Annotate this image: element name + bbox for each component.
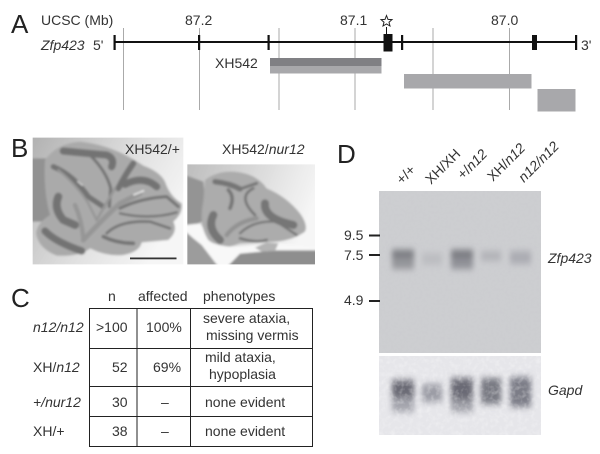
- size marker 9.5: [344, 227, 380, 243]
- panel letter B: B: [11, 133, 28, 163]
- Zfp423 blot: [379, 191, 541, 353]
- panel: C phenotype table: [11, 283, 312, 446]
- lane labels: [393, 138, 562, 187]
- XH542 deletion bar: [270, 58, 382, 74]
- row n12/n12: >100: [96, 319, 128, 335]
- scale bar: [130, 258, 176, 259]
- row XH/+: 38: [112, 423, 128, 439]
- row +/nur12: –: [161, 394, 169, 410]
- row n12/n12: 100%: [146, 319, 182, 335]
- panel letter A: A: [11, 9, 29, 39]
- size marker 4.9: [344, 292, 380, 308]
- row n12/n12: [33, 310, 299, 343]
- Gapd blot: [379, 356, 541, 435]
- row +/nur12: [33, 394, 285, 410]
- row XH/+: XH/+: [33, 423, 65, 439]
- row XH/+: –: [161, 423, 169, 439]
- deletion bar 2: [404, 74, 532, 88]
- table grid: [90, 308, 312, 446]
- table header: phenotypes: [203, 288, 275, 304]
- row XH/n12: [33, 349, 276, 382]
- coordinate 87.0: 87.0: [491, 12, 518, 28]
- label XH542/+: XH542/+: [125, 141, 180, 157]
- row XH/n12: 52: [112, 359, 128, 375]
- lane labels: n12/n12: [515, 138, 562, 185]
- gene label Zfp423 5': 5': [93, 37, 103, 53]
- row n12/n12: n12/n12: [33, 319, 84, 335]
- lane labels: XH/n12: [484, 140, 528, 184]
- coordinate 87.2: 87.2: [185, 12, 212, 28]
- panel: B left histology section: [30, 135, 187, 267]
- panel: B right histology section: [185, 162, 318, 267]
- gene line with exons: [114, 27, 577, 52]
- grid lines: [124, 28, 510, 110]
- row XH/n12: mild ataxia,: [205, 349, 276, 365]
- label Zfp423: Zfp423: [547, 250, 592, 266]
- coordinate 87.1: 87.1: [340, 12, 367, 28]
- table header: [108, 288, 275, 304]
- row +/nur12: none evident: [205, 394, 285, 410]
- row XH/n12: XH/n12: [33, 359, 80, 375]
- size marker 7.5: [344, 247, 380, 263]
- table header: affected: [138, 288, 188, 304]
- gene label Zfp423 5': Zfp423: [40, 37, 85, 53]
- panel: A genomic map: [11, 9, 591, 112]
- 3' label: 3': [581, 37, 591, 53]
- row +/nur12: 30: [112, 394, 128, 410]
- row +/nur12: +/nur12: [33, 394, 81, 410]
- deletion bar 3: [538, 89, 576, 112]
- row XH/+: none evident: [205, 423, 285, 439]
- row XH/n12: hypoplasia: [209, 366, 276, 382]
- lane labels: +/n12: [454, 146, 490, 182]
- table header: n: [108, 288, 116, 304]
- row n12/n12: missing vermis: [206, 327, 299, 343]
- panel letter D: D: [337, 139, 356, 169]
- panel letter C: C: [11, 283, 30, 313]
- axis label UCSC (Mb): UCSC (Mb): [41, 12, 113, 28]
- label Gapd: Gapd: [548, 382, 583, 398]
- lane labels: XH/XH: [422, 146, 463, 187]
- icon: star marker: [381, 16, 392, 26]
- panel: D northern blot: [337, 138, 592, 435]
- size marker 4.9: 4.9: [344, 292, 364, 308]
- row n12/n12: severe ataxia,: [203, 310, 290, 326]
- size marker 7.5: 7.5: [344, 247, 364, 263]
- row XH/n12: 69%: [153, 359, 181, 375]
- label XH542: XH542: [215, 55, 258, 71]
- size marker 9.5: 9.5: [344, 227, 364, 243]
- lane labels: +/+: [393, 161, 418, 187]
- row XH/+: [33, 423, 285, 439]
- label XH542/nur12: XH542/nur12: [222, 141, 305, 157]
